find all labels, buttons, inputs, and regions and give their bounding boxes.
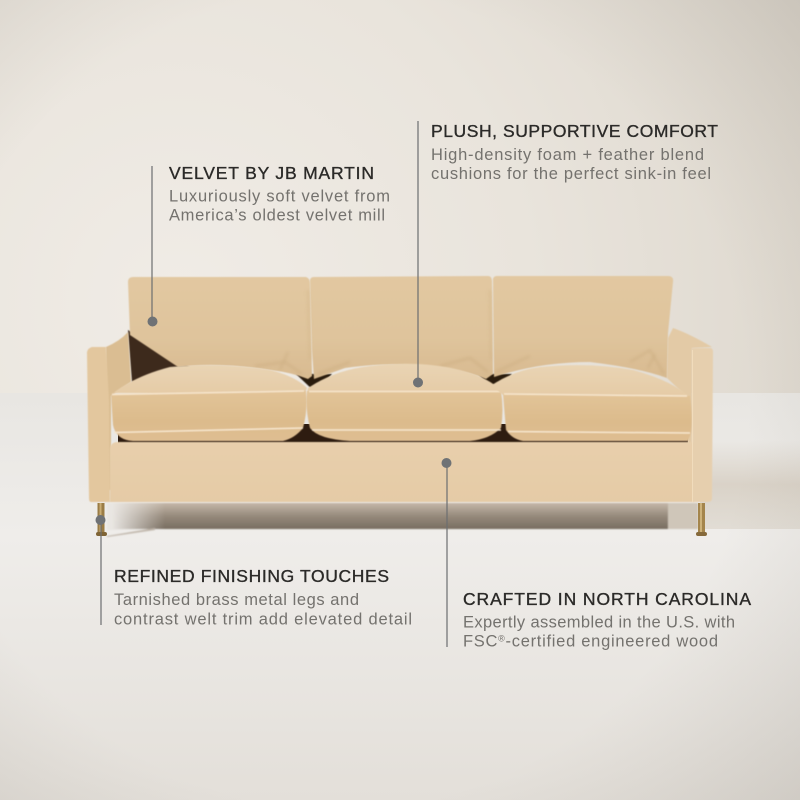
left arm inner <box>106 332 131 490</box>
leader line <box>100 520 102 625</box>
callout: velvet by jb martin <box>148 163 390 326</box>
marker dot <box>96 515 106 525</box>
body text line 2: America’s oldest velvet mill <box>169 206 385 224</box>
cushion folds <box>255 290 664 374</box>
seat deck shadow <box>118 424 688 444</box>
seat cushion right <box>492 365 692 441</box>
body text: Tarnished brass metal legs and <box>114 591 359 609</box>
marker dot <box>148 316 158 326</box>
back cushion right <box>493 276 673 378</box>
body text line 2: FSC <box>463 632 497 650</box>
seat cushion middle <box>306 364 502 441</box>
body text line 2: cushions for the perfect sink-in feel <box>431 165 711 183</box>
welt on right arm <box>692 350 694 502</box>
seat cushion left <box>111 365 307 441</box>
callout: plush supportive comfort <box>413 121 718 388</box>
body text: High-density foam + feather blend <box>431 146 704 164</box>
body text: Luxuriously soft velvet from <box>169 188 390 206</box>
dark gap left <box>128 330 190 382</box>
heading: PLUSH, SUPPORTIVE COMFORT <box>431 121 718 141</box>
callout: refined finishing touches <box>96 515 412 628</box>
background wall <box>0 0 800 394</box>
front rail <box>110 442 694 502</box>
floor shadow <box>107 503 698 537</box>
right arm inner <box>667 328 712 490</box>
sofa <box>87 276 713 537</box>
body text line 2: ® <box>498 634 505 644</box>
right floor shade <box>700 440 800 529</box>
callout: crafted in north carolina <box>442 458 751 650</box>
left arm front <box>87 347 110 502</box>
marker dot <box>442 458 452 468</box>
brass leg left <box>96 503 107 536</box>
brass leg right <box>696 503 707 536</box>
body text: Expertly assembled in the U.S. with <box>463 614 735 632</box>
background floor <box>0 393 800 800</box>
heading: REFINED FINISHING TOUCHES <box>114 566 389 586</box>
heading: CRAFTED IN NORTH CAROLINA <box>463 589 751 609</box>
heading: VELVET BY JB MARTIN <box>169 163 374 183</box>
leader line <box>151 166 153 321</box>
gap between back cushions <box>296 374 512 392</box>
leader line <box>417 121 419 382</box>
leader line <box>446 463 448 647</box>
right arm front <box>692 348 713 502</box>
back cushion middle <box>310 276 493 379</box>
marker dot <box>413 378 423 388</box>
body text line 2: -certified engineered wood <box>506 632 718 650</box>
back cushion left <box>128 277 312 379</box>
body text line 2: contrast welt trim add elevated detail <box>114 610 412 628</box>
